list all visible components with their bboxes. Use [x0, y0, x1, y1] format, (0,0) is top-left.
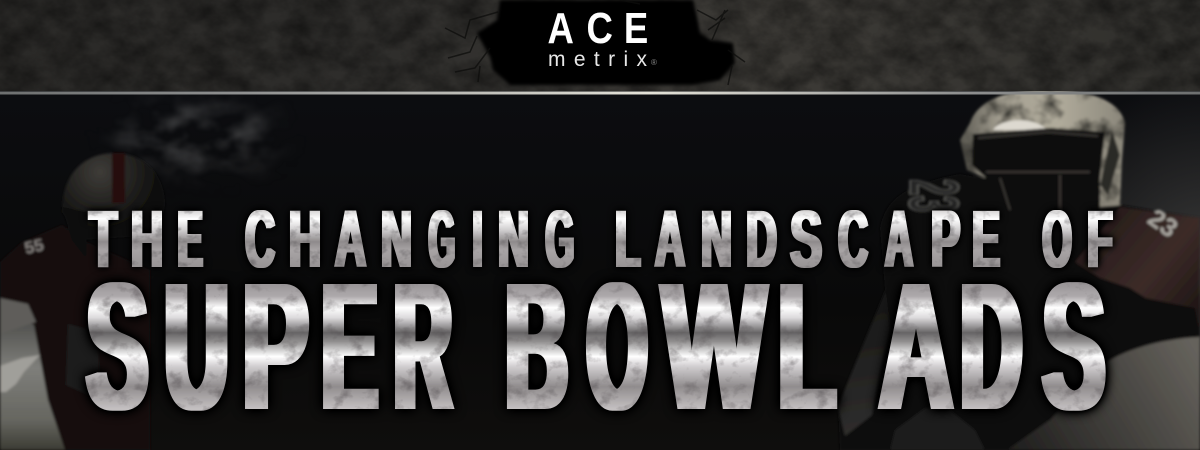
left player glove	[0, 355, 40, 392]
title line two: L	[778, 245, 834, 448]
logo	[548, 4, 657, 71]
mask highlights	[978, 132, 1098, 218]
registered mark: ®	[651, 58, 657, 67]
cracks	[445, 0, 745, 85]
left player facemask	[62, 207, 88, 258]
title line two: U	[165, 245, 228, 448]
sleeve number: 23	[1143, 202, 1183, 244]
title line two: P	[243, 245, 308, 448]
left player jersey	[0, 225, 150, 450]
left player	[0, 153, 165, 450]
title line one: P	[931, 194, 960, 285]
title line one: T	[89, 194, 117, 285]
title line two: S	[1043, 245, 1105, 448]
right player	[838, 90, 1200, 450]
left player side panel	[66, 324, 100, 400]
title line one: E	[178, 194, 203, 285]
title line one: G	[429, 194, 455, 285]
title line one: I	[473, 194, 482, 285]
silver divider line	[0, 92, 1200, 94]
glove	[890, 408, 985, 450]
title line one: F	[1087, 194, 1112, 285]
title line two: B	[506, 245, 568, 448]
black hole	[477, 0, 735, 85]
title line one: C	[838, 194, 868, 285]
right player torso	[838, 174, 1200, 450]
title line one: N	[381, 194, 412, 285]
logo ACE: ACE	[548, 4, 648, 53]
title line two: D	[961, 245, 1022, 448]
title line two: A	[880, 245, 952, 448]
title line two: O	[587, 245, 647, 448]
cracked wall hole	[445, 0, 745, 85]
title line one: E	[972, 194, 1000, 285]
title line one: H	[289, 194, 321, 285]
title line one: G	[546, 194, 574, 285]
title line two: W	[662, 245, 766, 448]
title line one: S	[790, 194, 822, 285]
title line one: A	[885, 194, 913, 285]
title line two: R	[394, 245, 452, 448]
right player helmet	[960, 90, 1125, 208]
left player helmet	[62, 153, 165, 240]
title line one: A	[655, 194, 685, 285]
title line two: E	[322, 245, 377, 448]
helmet forehead patch	[993, 120, 1047, 130]
title line one: H	[131, 194, 163, 285]
title line one: L	[615, 194, 640, 285]
right player: 23	[895, 179, 973, 212]
title line one: N	[701, 194, 732, 285]
title line one: D	[746, 194, 777, 285]
logo metrix: metrix	[548, 48, 648, 71]
smoke clouds	[115, 108, 275, 168]
right player lit forearm	[838, 290, 890, 436]
title line one: N	[498, 194, 529, 285]
title line one: C	[245, 194, 275, 285]
left jersey number: 55	[23, 235, 45, 258]
right player mesh panel	[1100, 290, 1200, 366]
right player sleeve	[1075, 207, 1200, 333]
helmet stripe	[112, 153, 125, 203]
helmet decal	[1100, 130, 1120, 195]
left field fog	[0, 310, 75, 450]
left player forearm	[0, 298, 36, 334]
title line one: A	[335, 194, 366, 285]
right player facemask	[972, 128, 1105, 226]
title line one: O	[1042, 194, 1072, 285]
top textured band	[0, 0, 1200, 91]
right player arm	[1007, 337, 1200, 450]
title line two: S	[87, 245, 148, 448]
